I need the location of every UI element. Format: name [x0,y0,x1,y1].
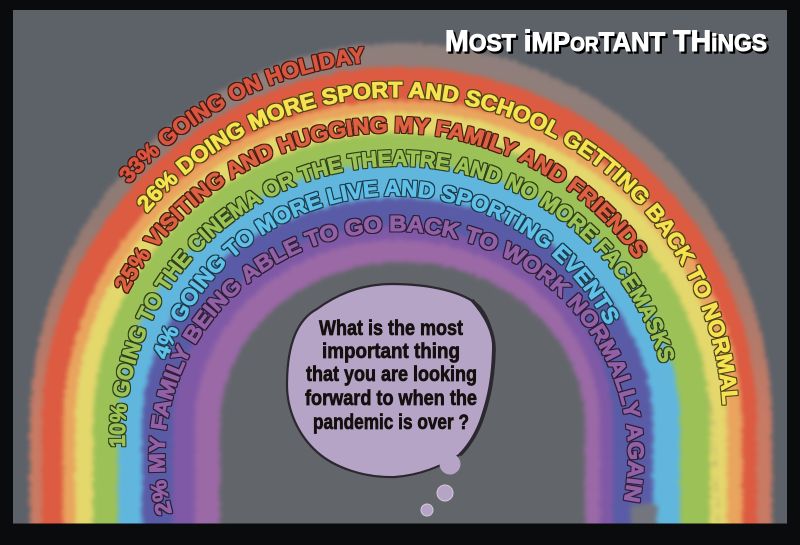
question text: important thing [322,340,460,363]
thought circle small [421,504,433,516]
label: 2% back to work: 2% MY FAMILY BEING ABLE TO GO BACK TO WORK NORMALLY AGAIN [148,214,646,516]
patch: faded indigo at bottom right [628,502,660,524]
band: blue [118,163,680,540]
rainbow inner grey [220,262,585,540]
label: 26% doing more sport: 26% DOING MORE SPORT AND SCHOOL GETTING BACK TO NORMAL [136,80,739,406]
label: 33% going on holiday: 33% GOING ON HOLIDAY [118,46,365,184]
speech bubble [287,284,494,516]
speckle: grey chalk on yellow [706,399,720,520]
label: 10% cinema or theatre: 10% GOING TO THE CINEMA OR THE THEATRE AND NO MORE FACEMASKS [108,149,676,448]
question text: forward to when the [305,387,477,410]
title: MOST iMPORTANT THiNGS [447,27,769,60]
band: yellow [75,112,727,540]
bubble shape [287,284,493,477]
thought circle large [440,454,460,474]
band: orange [63,100,742,540]
label: 4% live and sporting events: 4% GOING TO MORE LIVE AND SPORTING EVENTS [154,178,620,360]
label: 25% visiting and hugging: 25% VISITING AND HUGGING MY FAMILY AND FRIENDS [114,116,648,294]
question text: pandemic is over ? [313,411,469,434]
question text: that you are looking [306,363,477,386]
title: MOST iMPORTANT THiNGS [445,25,767,58]
band: red [42,67,757,540]
band: purple [173,226,613,540]
band: green [93,133,710,540]
band: pale purple [195,240,600,540]
band: indigo [142,198,653,540]
question text [305,317,477,434]
thought circle medium [437,485,453,501]
bubble right edge shadow [460,300,494,455]
question text: What is the most [319,317,463,340]
